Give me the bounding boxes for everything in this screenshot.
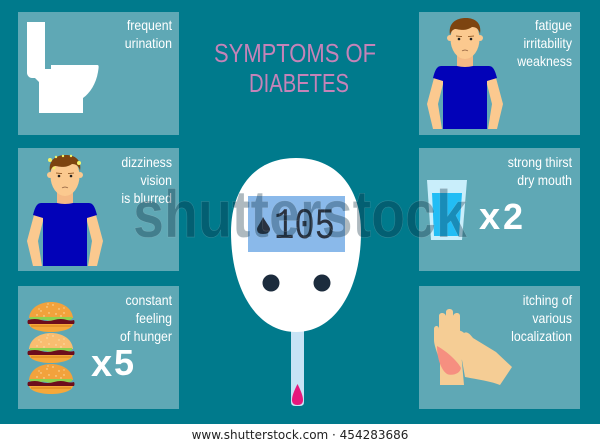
multiplier x5: x: [91, 343, 112, 385]
panel: hunger: 5: [114, 342, 134, 383]
text: thirst: strong thirst: [508, 154, 572, 170]
footer url: www.shutterstock.com · 454283686: [192, 428, 408, 442]
title: SYMPTOMS OF: [214, 38, 376, 68]
text: itching: localization: [511, 328, 572, 344]
text: fatigue: fatigue: [535, 17, 572, 33]
icon: glass of water: [427, 180, 467, 240]
text: dizziness: dizziness: [121, 154, 172, 170]
panel: thirst: [419, 148, 580, 271]
icon: tired man: [427, 18, 503, 129]
multiplier x2: x: [479, 196, 500, 238]
icon: dizzy man: [27, 155, 103, 266]
text: thirst: dry mouth: [517, 172, 572, 188]
icon: burgers: [28, 302, 74, 394]
buttons: [262, 274, 330, 292]
text: itching: [511, 292, 572, 344]
reading: 105: [274, 202, 335, 252]
panel: itching: [419, 286, 580, 409]
panel: fatigue: [419, 12, 580, 135]
watermark: shutterstock: [133, 177, 468, 252]
meter body: [231, 158, 361, 332]
text: dizziness: vision: [141, 172, 172, 188]
blood glucose meter: [231, 158, 361, 406]
text: itching: various: [532, 310, 572, 326]
test strip: [291, 330, 304, 406]
panel: hunger: [18, 286, 179, 409]
icon: toilet: [27, 22, 99, 113]
text: itching: itching of: [523, 292, 572, 308]
icon: hands: [434, 309, 512, 385]
text: hunger: feeling: [136, 310, 172, 326]
text: frequent urination: urination: [125, 35, 172, 51]
panel: dizziness: [18, 148, 179, 271]
text: frequent urination: [125, 17, 172, 51]
title: DIABETES: [249, 68, 349, 98]
text: hunger: constant: [125, 292, 172, 308]
text: fatigue: irritability: [523, 35, 572, 51]
panel: thirst: 2: [503, 196, 523, 237]
drop icon: [257, 217, 270, 234]
blood drop: [292, 384, 303, 405]
panel: frequent urination: [18, 12, 179, 135]
text: fatigue: weakness: [516, 53, 572, 69]
text: dizziness: is blurred: [121, 190, 172, 206]
text: thirst: [508, 154, 572, 188]
text: hunger: of hunger: [120, 328, 173, 344]
text: hunger: [120, 292, 173, 344]
text: dizziness: [121, 154, 172, 206]
title: [214, 38, 376, 98]
screen: [248, 196, 345, 252]
text: frequent urination: frequent: [127, 17, 172, 33]
text: fatigue: [516, 17, 572, 69]
